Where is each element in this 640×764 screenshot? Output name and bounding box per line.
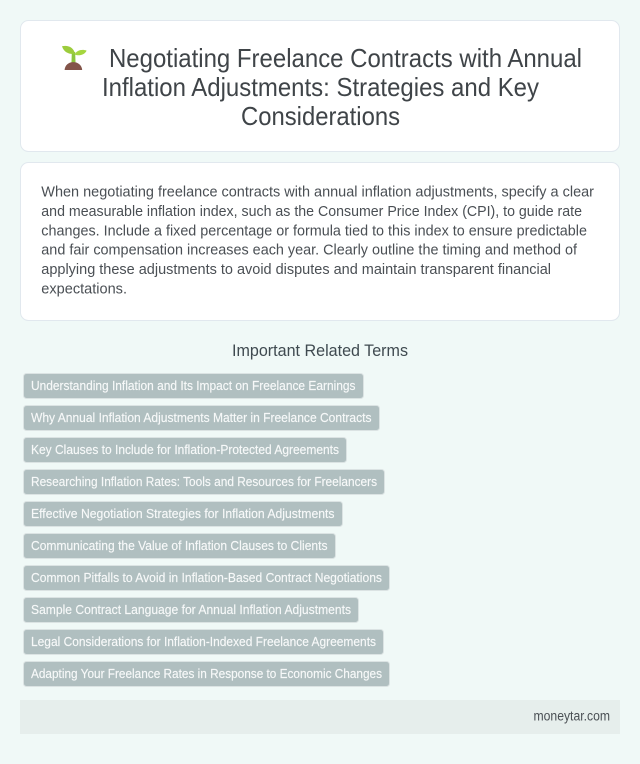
tag 7 xyxy=(24,566,390,590)
tag 4: Researching Inflation Rates: Tools and Resources for Freelancers xyxy=(31,474,377,489)
panel: title card xyxy=(20,20,620,152)
icon: seedling xyxy=(62,46,87,70)
tag 4 xyxy=(24,470,384,494)
tag 7: Common Pitfalls to Avoid in Inflation-Based Contract Negotiations xyxy=(31,570,382,585)
panel: summary paragraph xyxy=(20,162,620,320)
title xyxy=(102,43,582,131)
text block: summary: and fair compensation increases each year. Clearly outline the timing and method of xyxy=(41,242,578,258)
tag 1 xyxy=(24,374,364,398)
text block: summary: changes. Include a fixed percentage or formula tied to this index to ensure predictable xyxy=(41,222,587,240)
tag 9: Legal Considerations for Inflation-Indexed Freelance Agreements xyxy=(31,634,376,649)
text block: summary: applying these adjustments to avoid disputes and maintain transparent financial xyxy=(41,261,551,278)
title: Negotiating Freelance Contracts with Annual xyxy=(109,43,582,73)
text block: summary xyxy=(41,184,594,298)
tag 8 xyxy=(24,598,358,622)
tag 6: Communicating the Value of Inflation Clauses to Clients xyxy=(31,538,328,553)
text block: summary: expectations. xyxy=(41,280,127,298)
tag 3: Key Clauses to Include for Inflation-Protected Agreements xyxy=(31,442,339,457)
footer bar xyxy=(20,700,620,734)
tag 5 xyxy=(24,502,342,526)
text block: summary: When negotiating freelance contracts with annual inflation adjustments, specify a clear xyxy=(41,184,594,200)
tag 3 xyxy=(24,438,346,462)
list of related term tags xyxy=(24,374,390,686)
tag 6 xyxy=(24,534,336,558)
title: Inflation Adjustments: Strategies and Key xyxy=(102,72,539,102)
tag 9 xyxy=(24,630,384,654)
tag 10: Adapting Your Freelance Rates in Response to Economic Changes xyxy=(31,666,382,681)
heading: important related terms: Important Related Terms xyxy=(232,342,408,360)
tag 2 xyxy=(24,406,380,430)
tag 2: Why Annual Inflation Adjustments Matter in Freelance Contracts xyxy=(31,410,372,425)
title: Considerations xyxy=(241,101,400,131)
tag 10 xyxy=(24,662,390,686)
tag 5: Effective Negotiation Strategies for Inflation Adjustments xyxy=(31,506,335,521)
footer source text: moneytar.com xyxy=(534,708,610,724)
text block: summary: and measurable inflation index, such as the Consumer Price Index (CPI), to guide rate xyxy=(41,203,582,220)
tag 1: Understanding Inflation and Its Impact on Freelance Earnings xyxy=(31,378,356,393)
tag 8: Sample Contract Language for Annual Inflation Adjustments xyxy=(31,602,351,617)
